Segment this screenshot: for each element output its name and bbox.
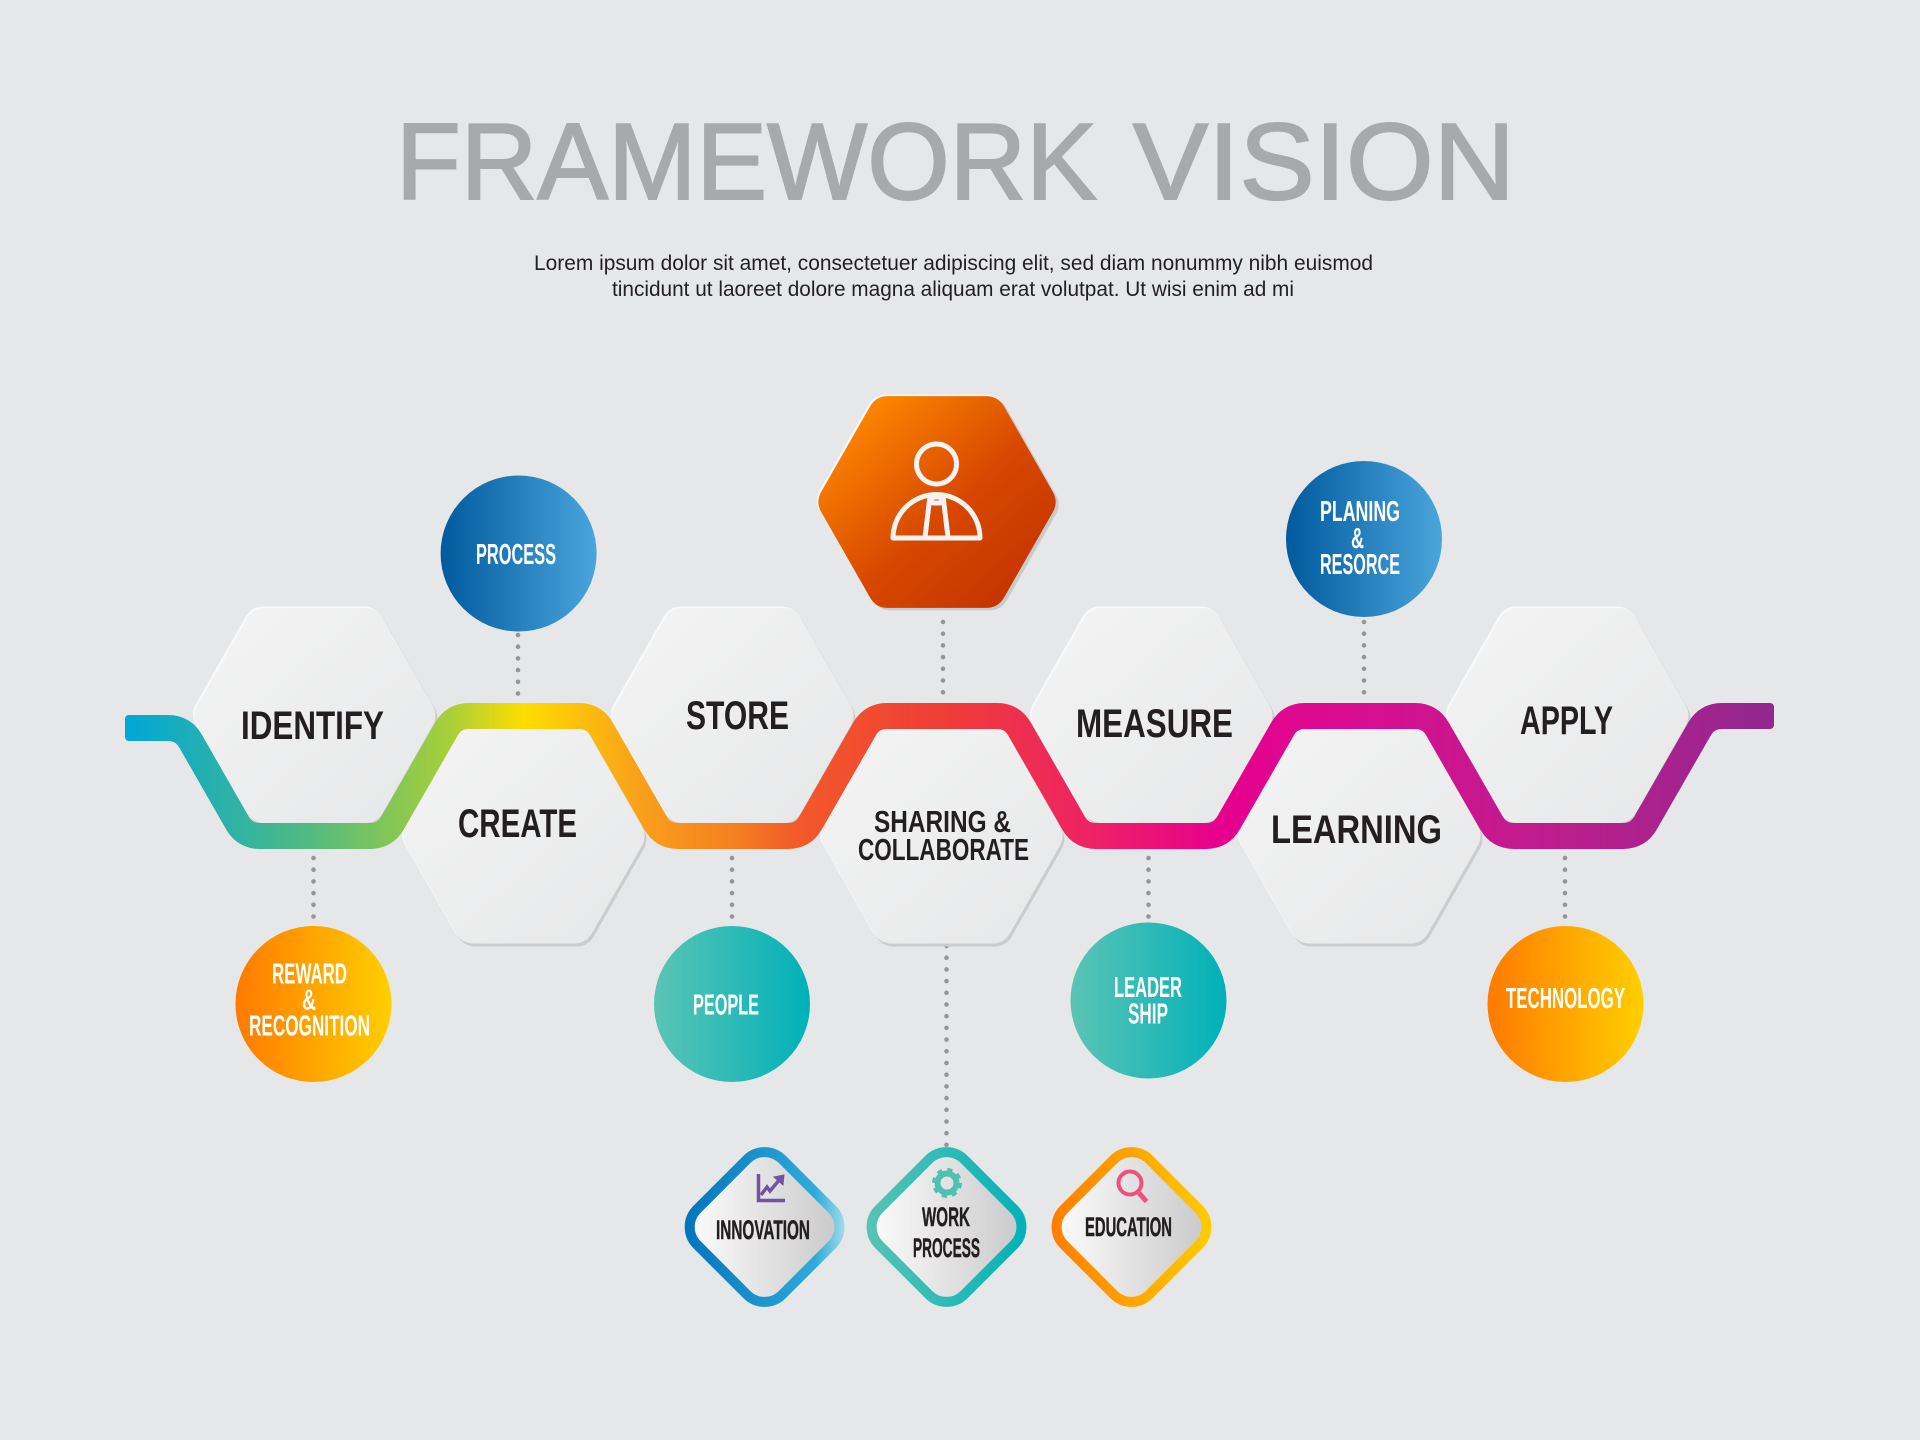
circle: leadership: SHIP	[1128, 998, 1168, 1030]
diamond: work process: WORK	[922, 1202, 970, 1232]
circle: technology: TECHNOLOGY	[1506, 983, 1625, 1015]
title: VISION	[1133, 101, 1515, 223]
circle: people	[654, 926, 810, 1082]
circle: leadership	[1070, 922, 1226, 1078]
hexagon: apply: APPLY	[1520, 699, 1613, 743]
subtitle text block: tincidunt ut laoreet dolore magna aliquam erat volutpat. Ut wisi enim ad mi	[612, 277, 1294, 301]
hexagon: store	[611, 606, 856, 826]
hexagon: measure	[1030, 606, 1274, 826]
circle: reward and recognition: &	[302, 984, 316, 1016]
title	[396, 101, 1515, 223]
diamond: work process: PROCESS	[913, 1233, 980, 1263]
circle: reward and recognition: REWARD	[272, 958, 347, 990]
circle: process	[441, 476, 597, 632]
hexagon: measure: MEASURE	[1076, 702, 1233, 746]
circle: planing and resorce: PLANING	[1320, 496, 1400, 528]
hexagon: sharing and collaborate: COLLABORATE	[858, 832, 1029, 867]
circle: reward and recognition: RECOGNITION	[249, 1010, 370, 1042]
diamond: innovation: INNOVATION	[716, 1215, 810, 1245]
dotted connectors	[314, 622, 1565, 1148]
icon: growth chart	[758, 1174, 785, 1200]
hexagon: sharing and collaborate: SHARING &	[874, 804, 1011, 839]
diamond: education: EDUCATION	[1085, 1212, 1172, 1242]
subtitle text block: Lorem ipsum dolor sit amet, consectetuer adipiscing elit, sed diam nonummy nibh euismod	[534, 251, 1373, 275]
diamond: innovation	[679, 1142, 850, 1312]
title: FRAMEWORK	[396, 101, 1097, 223]
icon: person with tie	[893, 444, 980, 538]
circle: people: PEOPLE	[693, 990, 759, 1022]
diamond: education	[1046, 1142, 1217, 1312]
icon: magnifying glass	[1118, 1172, 1146, 1202]
subtitle text block	[534, 251, 1373, 301]
circle: technology	[1488, 926, 1644, 1082]
hexagon: identify: IDENTIFY	[241, 704, 384, 748]
hexagon: learning	[1238, 727, 1482, 946]
hexagon: create: CREATE	[458, 802, 577, 846]
hexagon: create	[402, 727, 646, 946]
hexagon: store: STORE	[686, 694, 789, 738]
circle: process: PROCESS	[476, 539, 556, 571]
circle: reward and recognition	[236, 926, 392, 1082]
circle: planing and resorce	[1286, 461, 1442, 617]
hexagon: apply	[1446, 606, 1690, 826]
circle: planing and resorce: RESORCE	[1320, 549, 1400, 581]
hexagon: identify	[193, 606, 438, 826]
hexagon: sharing and collaborate	[820, 727, 1064, 946]
hexagon: learning: LEARNING	[1271, 808, 1442, 852]
diamond: work process	[861, 1142, 1032, 1312]
orange hexagon with person icon	[817, 395, 1059, 610]
circle: leadership: LEADER	[1114, 972, 1182, 1004]
circle: planing and resorce: &	[1351, 523, 1364, 555]
gradient ribbon	[125, 703, 1774, 836]
icon: gear	[934, 1170, 960, 1196]
